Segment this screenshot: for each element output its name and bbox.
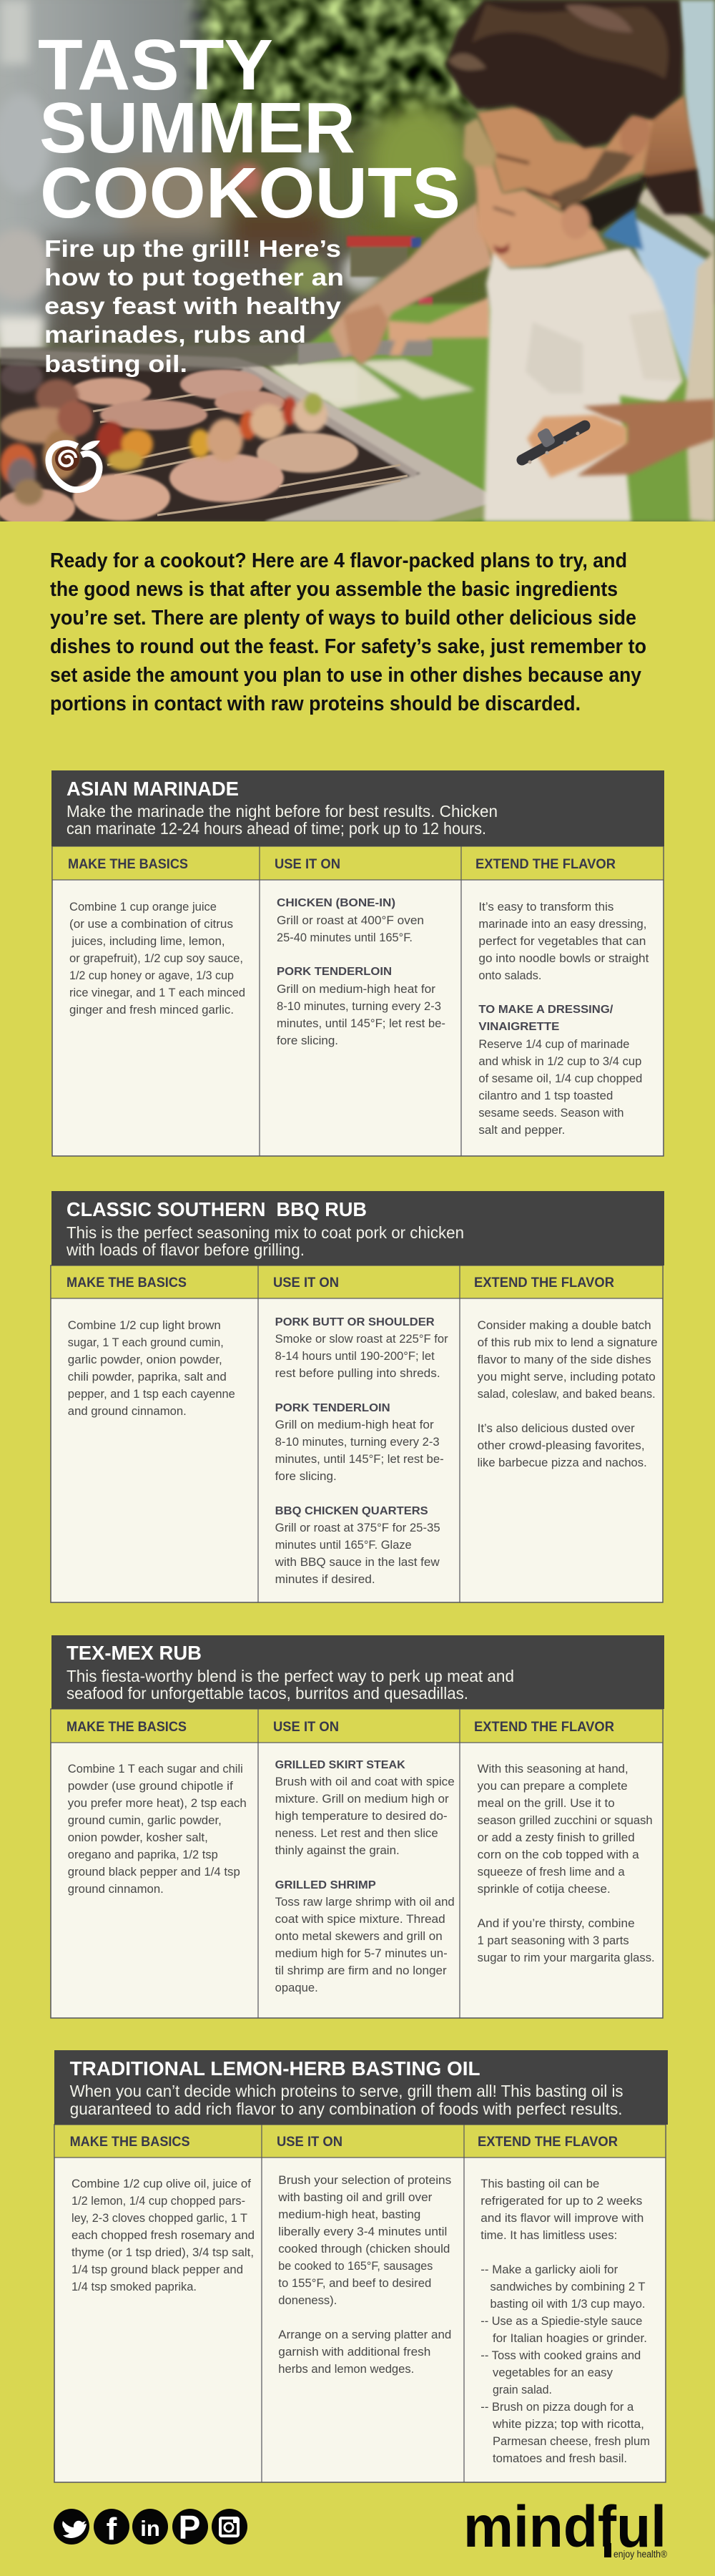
icon: facebook <box>94 2509 129 2547</box>
column: use it on <box>277 897 445 1047</box>
column: use it on: PORK TENDERLOIN <box>275 1402 390 1414</box>
ornamental grass <box>365 104 493 308</box>
column: extend the flavor: This basting oil can be <box>480 2178 599 2190</box>
column: use it on: 8-10 minutes, turning every 2-3 <box>277 1000 441 1013</box>
column: extend the flavor: Consider making a double batch <box>478 1319 651 1332</box>
panel header: Make the marinade the night before for best results. Chicken <box>66 802 498 821</box>
column headings: USE IT ON <box>277 2135 342 2150</box>
panel header <box>54 2050 668 2125</box>
social media icons <box>54 2509 247 2547</box>
column: use it on: BBQ CHICKEN QUARTERS <box>275 1505 428 1517</box>
column: use it on: minutes if desired. <box>275 1573 375 1586</box>
column: use it on: medium-high heat, basting <box>278 2208 420 2221</box>
boy's blond hair <box>463 118 497 172</box>
man's neck <box>640 95 704 215</box>
icon: linkedin: in <box>140 2516 160 2541</box>
column: extend the flavor: flavor to many of the side dishes <box>478 1353 651 1366</box>
hero photo: father and son at the grill <box>0 0 715 527</box>
column: use it on: neness. Let rest and then slice <box>275 1827 438 1840</box>
title: SUMMER <box>39 88 355 168</box>
man's face <box>477 105 654 212</box>
column headings: EXTEND THE FLAVOR <box>478 2135 618 2150</box>
subtitle: easy feast with healthy <box>44 293 342 319</box>
column: extend the flavor: salad, coleslaw, and baked beans. <box>478 1388 656 1401</box>
subtitle: how to put together an <box>44 264 344 290</box>
man's shirt, apron and shorts <box>602 0 715 522</box>
column headings: MAKE THE BASICS <box>66 1275 187 1291</box>
column: extend the flavor: go into noodle bowls or straight <box>478 952 649 965</box>
column: use it on: garnish with additional fresh <box>278 2346 430 2359</box>
column headings: USE IT ON <box>273 1275 339 1291</box>
column: extend the flavor: With this seasoning at hand, <box>478 1763 628 1776</box>
column: extend the flavor: you might serve, including potato <box>478 1371 656 1384</box>
panel header: can marinate 12-24 hours ahead of time; pork up to 12 hours. <box>66 819 486 838</box>
subtitle: Fire up the grill! Here’s <box>44 235 341 262</box>
column: use it on: PORK TENDERLOIN <box>277 966 392 978</box>
icon: twitter <box>54 2509 89 2545</box>
column: make the basics: ground cumin, garlic powder, <box>68 1814 222 1827</box>
column: extend the flavor: salt and pepper. <box>478 1124 565 1137</box>
column: use it on: Grill or roast at 375°F for 25-35 <box>275 1522 440 1534</box>
panel header <box>51 770 664 846</box>
column: extend the flavor: corn on the cob topped with a <box>478 1848 640 1861</box>
column: make the basics: ginger and fresh minced garlic. <box>69 1004 234 1017</box>
column: extend the flavor: And if you’re thirsty, combine <box>478 1917 635 1930</box>
column: make the basics: 1/2 lemon, 1/4 cup chopped pars- <box>72 2195 245 2208</box>
man's hair <box>445 0 683 148</box>
column: make the basics: chili powder, paprika, salt and <box>68 1371 227 1384</box>
icon: pinterest <box>172 2509 208 2546</box>
column: make the basics <box>68 1319 235 1418</box>
mindful logo: enjoy health® <box>613 2549 667 2560</box>
column: make the basics: garlic powder, onion powder, <box>68 1353 222 1366</box>
panel header: guaranteed to add rich flavor to any combination of foods with perfect results. <box>70 2100 623 2118</box>
column: make the basics: 1/4 tsp smoked paprika. <box>72 2281 197 2293</box>
column: extend the flavor: vegetables for an easy <box>493 2366 613 2379</box>
panel header <box>51 1191 664 1265</box>
column: use it on: onto metal skewers and grill on <box>275 1930 443 1943</box>
grilled patties <box>0 369 358 527</box>
column: make the basics: 1/2 cup honey or agave, 1/3 cup <box>69 969 234 982</box>
column headings: EXTEND THE FLAVOR <box>475 857 616 872</box>
column: extend the flavor: sprinkle of cotija cheese. <box>478 1883 611 1896</box>
column: extend the flavor: and whisk in 1/2 cup to 3/4 cup <box>478 1055 641 1068</box>
column: use it on: PORK BUTT OR SHOULDER <box>275 1316 435 1328</box>
panel header: ASIAN MARINADE <box>66 778 239 800</box>
column: use it on: Smoke or slow roast at 225°F for <box>275 1333 448 1346</box>
panel: Traditional lemon-herb basting oil <box>54 2050 668 2482</box>
column: use it on: GRILLED SKIRT STEAK <box>275 1759 405 1771</box>
panel header: This is the perfect seasoning mix to coat pork or chicken <box>66 1223 464 1242</box>
grill grates <box>93 386 408 515</box>
column: extend the flavor: -- Toss with cooked grains and <box>480 2349 641 2362</box>
column: extend the flavor: refrigerated for up to 2 weeks <box>480 2195 642 2208</box>
icon: linkedin <box>132 2509 168 2545</box>
column: extend the flavor <box>478 1763 655 1964</box>
column: use it on: coat with spice mixture. Thread <box>275 1913 445 1926</box>
column: use it on: minutes until 165°F. Glaze <box>275 1539 412 1552</box>
column: use it on: Arrange on a serving platter and <box>278 2328 451 2341</box>
column: make the basics: ley, 2-3 cloves chopped garlic, 1 T <box>72 2212 247 2225</box>
column: make the basics <box>68 1763 247 1896</box>
column headings: MAKE THE BASICS <box>68 857 188 872</box>
column: extend the flavor: TO MAKE A DRESSING/ <box>478 1004 613 1016</box>
column: extend the flavor: season grilled zucchini or squash <box>478 1814 653 1827</box>
icon: apple spiral logo <box>49 441 100 490</box>
column headings: EXTEND THE FLAVOR <box>474 1720 614 1735</box>
icon: facebook: f <box>107 2512 117 2547</box>
column: make the basics: onion powder, kosher salt, <box>68 1831 208 1844</box>
panel header: TEX-MEX RUB <box>66 1642 202 1664</box>
column: make the basics: (or use a combination of citrus <box>69 918 233 931</box>
column: extend the flavor: like barbecue pizza and nachos. <box>478 1456 647 1469</box>
grill body <box>0 349 498 521</box>
tongs in boy's hand <box>522 426 585 464</box>
column: use it on <box>275 1759 455 1994</box>
boy's fist holding tongs <box>527 415 627 478</box>
column: use it on: with basting oil and grill over <box>277 2191 433 2204</box>
column: extend the flavor <box>478 1319 658 1469</box>
column: make the basics: you prefer more heat), 2 tsp each <box>68 1797 247 1810</box>
column: use it on: high temperature to desired do- <box>275 1810 448 1823</box>
column: use it on: with BBQ sauce in the last few <box>275 1556 440 1569</box>
column: make the basics: Combine 1 T each sugar and chili <box>68 1763 243 1776</box>
column: extend the flavor: of sesame oil, 1/4 cup chopped <box>478 1072 642 1085</box>
column: extend the flavor: you can prepare a complete <box>478 1780 628 1793</box>
column: use it on: fore slicing. <box>275 1470 337 1483</box>
column: extend the flavor: onto salads. <box>478 969 541 982</box>
subtitle: basting oil. <box>44 351 187 377</box>
intro paragraph: the good news is that after you assemble the basic ingredients <box>50 578 618 601</box>
column: use it on: opaque. <box>275 1982 318 1994</box>
column: make the basics: Combine 1/2 cup olive oil, juice of <box>72 2178 251 2190</box>
column: extend the flavor: for Italian hoagies or grinder. <box>493 2332 647 2345</box>
column: extend the flavor: cilantro and 1 tsp toasted <box>478 1089 613 1102</box>
column: make the basics: ground cinnamon. <box>68 1883 164 1896</box>
panel header: with loads of flavor before grilling. <box>66 1240 305 1259</box>
boy's t-shirt <box>484 248 683 521</box>
smoke highlights <box>0 0 380 352</box>
kebab skewers <box>0 361 327 505</box>
column: extend the flavor: sugar to rim your margarita glass. <box>478 1951 655 1964</box>
intro paragraph <box>50 549 646 715</box>
column: use it on: Toss raw large shrimp with oil and <box>275 1896 455 1909</box>
column: use it on: fore slicing. <box>277 1034 338 1047</box>
panel: Tex-Mex rub <box>51 1635 664 2018</box>
column: use it on: mixture. Grill on medium high or <box>275 1793 449 1806</box>
column: use it on <box>275 1316 448 1586</box>
toy goal <box>347 236 433 308</box>
column: use it on: thinly against the grain. <box>275 1844 400 1857</box>
column: extend the flavor: sandwiches by combining 2 T <box>490 2281 645 2293</box>
column: make the basics: juices, including lime, lemon, <box>71 935 225 948</box>
panel header: This fiesta-worthy blend is the perfect way to perk up meat and <box>66 1667 514 1685</box>
column: extend the flavor: -- Use as a Spiedie-style sauce <box>480 2315 642 2328</box>
column: extend the flavor: VINAIGRETTE <box>478 1021 560 1033</box>
subtitle <box>44 235 344 377</box>
column: use it on: CHICKEN (BONE-IN) <box>277 897 395 909</box>
column: extend the flavor: of this rub mix to lend a signature <box>478 1336 658 1349</box>
column: use it on: be cooked to 165°F, sausages <box>278 2260 433 2273</box>
column headings <box>68 857 616 872</box>
blurred yard behind title <box>0 0 357 348</box>
column: use it on: Grill on medium-high heat for <box>277 983 436 996</box>
column: use it on: til shrimp are firm and no longer <box>275 1964 447 1977</box>
column: use it on: minutes, until 145°F; let rest be- <box>275 1453 444 1466</box>
boy's arm and hand <box>388 297 490 356</box>
panel header: CLASSIC SOUTHERN BBQ RUB <box>66 1198 367 1220</box>
column: use it on: Grill on medium-high heat for <box>275 1419 434 1431</box>
column: extend the flavor: tomatoes and fresh basil. <box>493 2452 627 2465</box>
column: extend the flavor: meal on the grill. Use it to <box>478 1797 615 1810</box>
column headings: MAKE THE BASICS <box>66 1720 187 1735</box>
man's lower hand <box>577 399 715 476</box>
column: use it on: 25-40 minutes until 165°F. <box>277 931 413 944</box>
column: make the basics: ground black pepper and 1/4 tsp <box>68 1866 240 1879</box>
column: extend the flavor: and its flavor will improve with <box>480 2212 644 2225</box>
man's forearm and hand <box>329 202 493 365</box>
column: use it on: herbs and lemon wedges. <box>278 2363 414 2376</box>
column: extend the flavor: or add a zesty finish to grilled <box>478 1831 635 1844</box>
tongs over the grill <box>0 339 432 372</box>
panel header <box>51 1635 664 1709</box>
column: make the basics: pepper, and 1 tsp each cayenne <box>68 1388 235 1401</box>
column: make the basics: oregano and paprika, 1/2 tsp <box>68 1848 218 1861</box>
column: extend the flavor <box>480 2178 650 2465</box>
column: make the basics: thyme (or 1 tsp dried), 3/4 tsp salt, <box>72 2246 254 2259</box>
column: extend the flavor: other crowd-pleasing favorites, <box>478 1439 645 1452</box>
column: extend the flavor: time. It has limitless uses: <box>480 2229 617 2242</box>
column: use it on: cooked through (chicken should <box>278 2243 450 2256</box>
subtitle: marinades, rubs and <box>44 321 306 348</box>
column: make the basics: and ground cinnamon. <box>68 1405 187 1418</box>
column: use it on: minutes, until 145°F; let rest be- <box>277 1017 445 1030</box>
column: use it on: 8-10 minutes, turning every 2-3 <box>275 1436 440 1449</box>
panel header: When you can’t decide which proteins to serve, grill them all! This basting oil is <box>70 2082 623 2100</box>
column: make the basics: Combine 1/2 cup light brown <box>68 1319 221 1332</box>
column: extend the flavor <box>478 901 649 1137</box>
lawn and stepping stones <box>268 304 715 521</box>
column: use it on: Grill or roast at 400°F oven <box>277 914 424 927</box>
column headings: MAKE THE BASICS <box>70 2135 190 2150</box>
column: extend the flavor: -- Make a garlicky aioli for <box>480 2263 618 2276</box>
column: extend the flavor: It’s easy to transform this <box>478 901 613 914</box>
intro paragraph: you’re set. There are plenty of ways to build other delicious side <box>50 607 636 630</box>
column: extend the flavor: perfect for vegetables that can <box>478 935 646 948</box>
column: extend the flavor: It’s also delicious dusted over <box>478 1422 635 1435</box>
column: make the basics: powder (use ground chipotle if <box>68 1780 233 1793</box>
column headings <box>66 1720 614 1735</box>
mindful logo: mindful <box>463 2494 666 2560</box>
column: make the basics <box>72 2178 255 2293</box>
column headings: EXTEND THE FLAVOR <box>474 1275 614 1291</box>
intro paragraph: set aside the amount you plan to use in other dishes because any <box>50 664 641 687</box>
column: extend the flavor: Reserve 1/4 cup of marinade <box>478 1038 629 1051</box>
column: extend the flavor: marinade into an easy dressing, <box>478 918 646 931</box>
intro paragraph: dishes to round out the feast. For safety’s sake, just remember to <box>50 635 646 658</box>
column: extend the flavor: 1 part seasoning with 3 parts <box>478 1934 629 1947</box>
column: extend the flavor: squeeze of fresh lime and a <box>478 1866 626 1879</box>
panel: Asian marinade <box>51 770 664 1156</box>
column: make the basics: 1/4 tsp ground black pepper and <box>72 2263 243 2276</box>
column headings: USE IT ON <box>273 1720 339 1735</box>
column: make the basics: rice vinegar, and 1 T each minced <box>69 986 245 999</box>
column: use it on: liberally every 3-4 minutes until <box>278 2225 447 2238</box>
column headings: USE IT ON <box>275 857 340 872</box>
column: use it on <box>277 2174 451 2376</box>
panel: Classic Southern BBQ rub <box>51 1191 664 1602</box>
column headings <box>70 2135 618 2150</box>
column: use it on: Brush your selection of proteins <box>278 2174 451 2187</box>
title: TASTY <box>38 25 273 105</box>
title <box>38 25 460 233</box>
intro paragraph: portions in contact with raw proteins should be discarded. <box>50 692 581 715</box>
column: use it on: Brush with oil and coat with spice <box>275 1776 455 1788</box>
panel header: TRADITIONAL LEMON-HERB BASTING OIL <box>70 2057 480 2080</box>
column: make the basics: sugar, 1 T each ground cumin, <box>68 1336 224 1349</box>
intro paragraph: Ready for a cookout? Here are 4 flavor-packed plans to try, and <box>50 549 627 572</box>
icon: pinterest: P <box>179 2509 200 2546</box>
column: use it on: doneness). <box>278 2294 337 2307</box>
column: make the basics: each chopped fresh rosemary and <box>72 2229 255 2242</box>
panel header: seafood for unforgettable tacos, burritos and quesadillas. <box>66 1684 468 1703</box>
icon: instagram <box>212 2509 247 2545</box>
column headings <box>66 1275 614 1291</box>
column: use it on: rest before pulling into shreds. <box>275 1367 440 1380</box>
column: extend the flavor: sesame seeds. Season with <box>478 1107 623 1120</box>
column: make the basics: Combine 1 cup orange juice <box>69 901 217 914</box>
column: extend the flavor: -- Brush on pizza dough for a <box>480 2401 634 2414</box>
column: make the basics: or grapefruit), 1/2 cup soy sauce, <box>69 952 243 965</box>
column: use it on: 8-14 hours until 190-200°F; let <box>275 1350 435 1363</box>
boy's face and hair <box>474 166 647 268</box>
title: COOKOUTS <box>40 153 460 233</box>
column: use it on: medium high for 5-7 minutes un- <box>275 1947 448 1960</box>
column: use it on: to 155°F, and beef to desired <box>278 2277 431 2290</box>
column: extend the flavor: grain salad. <box>493 2384 552 2396</box>
column: make the basics <box>69 901 245 1017</box>
column: extend the flavor: Parmesan cheese, fresh plum <box>493 2435 650 2448</box>
column: extend the flavor: white pizza; top with ricotta, <box>492 2418 644 2431</box>
foliage backdrop <box>184 0 488 136</box>
column: extend the flavor: basting oil with 1/3 cup mayo. <box>490 2298 645 2311</box>
column: use it on: GRILLED SHRIMP <box>275 1879 376 1891</box>
